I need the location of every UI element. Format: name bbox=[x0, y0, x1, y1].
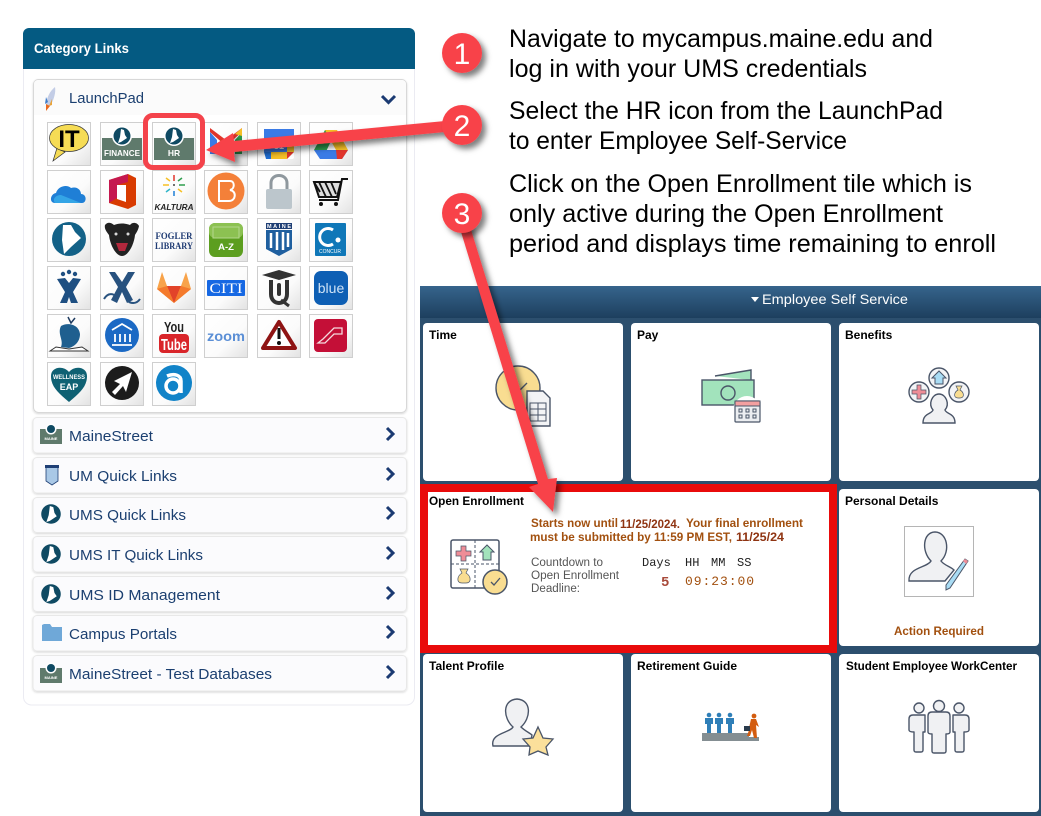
countdown timer: HH bbox=[685, 556, 699, 570]
tile: Personal Details: Personal Details bbox=[845, 494, 939, 508]
tile: Pay bbox=[631, 323, 831, 481]
countdown timer: MM bbox=[711, 556, 725, 570]
icon: confluence X bbox=[100, 266, 144, 310]
icon: jira bbox=[48, 266, 90, 310]
tile: Pay: Pay bbox=[637, 328, 659, 342]
icon: graduation Q bbox=[258, 266, 300, 310]
icon: YouTube: You bbox=[164, 319, 184, 336]
icon: warning triangle bbox=[258, 314, 300, 358]
row: UM Quick Links: UM Quick Links bbox=[69, 468, 177, 485]
countdown label bbox=[531, 557, 620, 595]
highlight: HR icon outline bbox=[146, 116, 202, 168]
tile: Benefits: Benefits bbox=[845, 328, 893, 342]
icon: Maine shield: MAINE bbox=[267, 224, 291, 230]
step 3 text bbox=[509, 170, 996, 258]
icon: HR bbox=[152, 122, 196, 166]
icon: wellness EAP heart: WELLNESS bbox=[53, 374, 86, 381]
countdown label: Deadline: bbox=[531, 583, 580, 595]
icon: YouTube: Tube bbox=[161, 337, 187, 354]
row: Campus Portals: Campus Portals bbox=[69, 626, 177, 643]
icon: person with star bbox=[493, 699, 553, 755]
step 2 text bbox=[509, 97, 943, 155]
icon: institution bbox=[100, 314, 144, 358]
row: MaineStreet - Test Databases: MAINE bbox=[45, 675, 58, 680]
icon: onedrive bbox=[48, 170, 90, 214]
badge 1 bbox=[442, 33, 482, 73]
icon: black bear bbox=[100, 218, 144, 262]
enrollment deadline notice: Your final enrollment bbox=[686, 518, 803, 530]
arrow: badge 2 to HR icon bbox=[206, 121, 445, 162]
icon: IT: IT bbox=[58, 126, 80, 153]
icon: person with pencil bbox=[904, 526, 974, 596]
tile: Open Enrollment with red highlight: Open Enrollment bbox=[429, 494, 524, 508]
icon: rocket bbox=[45, 87, 55, 111]
icon: kaltura: KALTURA bbox=[154, 203, 194, 212]
enrollment deadline notice: 11/25/2024. bbox=[620, 519, 680, 531]
step 2 text: Select the HR icon from the LaunchPad bbox=[509, 97, 943, 125]
tile: Retirement Guide: Retirement Guide bbox=[637, 659, 737, 673]
icon: office bbox=[100, 170, 144, 214]
row: UMS ID Management: UMS ID Management bbox=[69, 587, 221, 604]
arrow: badge 3 to Open Enrollment tile bbox=[458, 220, 557, 512]
tile: Personal Details: Action Required bbox=[894, 624, 984, 638]
icon: collapse chevron bbox=[382, 96, 395, 102]
tile: Talent Profile: Talent Profile bbox=[429, 659, 504, 673]
icon: person with benefits bubbles bbox=[909, 368, 969, 423]
step 1 text: log in with your UMS credentials bbox=[509, 55, 867, 83]
icon: clock and timesheet bbox=[496, 366, 550, 426]
icon: apple and book bbox=[48, 314, 90, 358]
icon: kaltura bbox=[152, 170, 196, 214]
icon: A-Z databases bbox=[204, 218, 248, 262]
launchpad accordion box: LaunchPad bbox=[69, 90, 144, 107]
countdown label: Open Enrollment bbox=[531, 570, 620, 582]
icon: fogler library: LIBRARY bbox=[155, 242, 193, 252]
icon: fogler library bbox=[152, 218, 196, 262]
step 3 text: period and displays time remaining to enroll bbox=[509, 230, 996, 258]
icon: red arrows bbox=[310, 314, 352, 358]
step 1 text bbox=[509, 25, 933, 83]
icon: finance bbox=[100, 122, 144, 166]
icon: wellness EAP heart bbox=[48, 362, 90, 406]
icon: gmail bbox=[204, 122, 248, 166]
icon: HR: HR bbox=[168, 148, 180, 158]
tile: Open Enrollment with red highlight bbox=[424, 488, 833, 649]
icon: shopping cart bbox=[310, 170, 352, 214]
badge 2 bbox=[442, 105, 482, 145]
badge 1: 1 bbox=[454, 38, 470, 71]
row: UMS IT Quick Links: UMS IT Quick Links bbox=[69, 547, 203, 564]
enrollment deadline notice: 11/25/24 bbox=[736, 532, 785, 544]
panel: employee self service bbox=[420, 286, 1041, 816]
icon: blue bbox=[310, 266, 352, 310]
icon: Maine shield bbox=[258, 218, 300, 262]
icon: zoom: zoom bbox=[207, 329, 245, 344]
icon: YouTube bbox=[152, 314, 196, 358]
icon: wellness EAP heart: EAP bbox=[60, 382, 78, 392]
icon: finance: FINANCE bbox=[104, 148, 140, 158]
step 2 text: to enter Employee Self-Service bbox=[509, 127, 847, 155]
icon: retirement staircase bbox=[702, 713, 759, 741]
icon: IT bbox=[48, 122, 90, 166]
icon: gitlab bbox=[152, 266, 196, 310]
icon: money and calendar bbox=[702, 370, 761, 424]
row: UMS Quick Links: UMS Quick Links bbox=[69, 507, 186, 524]
panel: category links bbox=[23, 28, 415, 705]
icon: brightspace bbox=[204, 170, 248, 214]
banner: Employee Self Service bbox=[762, 291, 908, 307]
enrollment deadline notice: Starts now until bbox=[531, 518, 618, 530]
countdown label: Countdown to bbox=[531, 557, 603, 569]
row: MaineStreet: MaineStreet bbox=[69, 428, 154, 445]
tile: Benefits bbox=[839, 323, 1039, 481]
row: UMS IT Quick Links bbox=[33, 536, 406, 572]
icon: padlock bbox=[258, 170, 300, 214]
panel header bbox=[23, 28, 415, 69]
badge 3: 3 bbox=[454, 198, 470, 231]
row: UMS Quick Links bbox=[33, 498, 406, 532]
tile: Retirement Guide bbox=[631, 654, 831, 812]
icon: enrollment grid and clock bbox=[451, 540, 507, 594]
tile: Student Employee WorkCenter bbox=[839, 654, 1039, 812]
icon: CITI: CITI bbox=[210, 281, 242, 297]
icon: concur: CONCUR bbox=[319, 249, 341, 255]
panel header: Category Links bbox=[34, 41, 129, 56]
countdown timer: Days bbox=[642, 556, 671, 570]
countdown timer bbox=[642, 556, 754, 591]
badge 2: 2 bbox=[454, 110, 470, 143]
enrollment deadline notice bbox=[530, 518, 803, 544]
row: MaineStreet: MAINE bbox=[45, 436, 58, 441]
enrollment deadline notice: must be submitted by 11:59 PM EST, bbox=[530, 532, 732, 544]
icon: zoom bbox=[204, 314, 248, 358]
icon: A-Z databases: A-Z bbox=[218, 242, 234, 253]
tile: Time bbox=[423, 323, 623, 481]
tile: Talent Profile bbox=[423, 654, 623, 812]
icon: three people bbox=[909, 700, 969, 753]
row: MaineStreet - Test Databases: MaineStreet - Test Databases bbox=[69, 666, 272, 683]
countdown timer: SS bbox=[737, 556, 751, 570]
icon: blue: blue bbox=[318, 280, 344, 296]
icon: calendar bbox=[258, 122, 300, 166]
icon: calendar: 31 bbox=[274, 141, 284, 151]
banner bbox=[420, 286, 1041, 318]
tile: Personal Details bbox=[839, 489, 1039, 646]
icon: drive bbox=[310, 122, 352, 166]
row: MaineStreet - Test Databases bbox=[33, 656, 406, 691]
step 3 text: only active during the Open Enrollment bbox=[509, 200, 943, 228]
row: MaineStreet bbox=[33, 418, 406, 453]
icon: arrow circle bbox=[100, 362, 144, 406]
launchpad accordion box bbox=[34, 80, 406, 412]
row: UMS ID Management bbox=[33, 576, 406, 612]
icon: concur bbox=[310, 218, 352, 262]
step 3 text: Click on the Open Enrollment tile which is bbox=[509, 170, 972, 198]
row: Campus Portals bbox=[33, 616, 406, 651]
icon: Maine circle bbox=[48, 218, 90, 262]
icon: fogler library: FOGLER bbox=[156, 232, 193, 242]
icon: a circle bbox=[152, 362, 196, 406]
badge 3 bbox=[442, 193, 482, 233]
icon: CITI bbox=[204, 266, 248, 310]
countdown timer: 09:23:00 bbox=[685, 574, 754, 589]
countdown timer: 5 bbox=[661, 575, 669, 591]
tile: Time: Time bbox=[429, 328, 457, 342]
tile: Student Employee WorkCenter: Student Employee WorkCenter bbox=[846, 659, 1017, 673]
step 1 text: Navigate to mycampus.maine.edu and bbox=[509, 25, 933, 53]
row: UM Quick Links bbox=[33, 458, 406, 493]
